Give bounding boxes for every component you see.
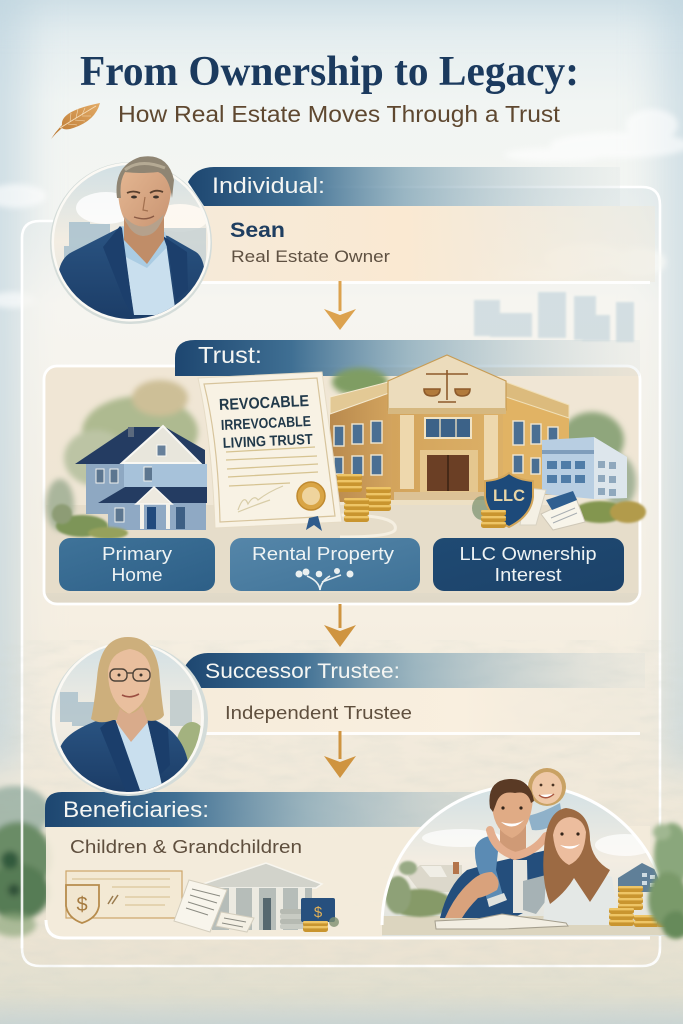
trees behind buildings	[46, 368, 636, 531]
individual panel	[200, 206, 655, 282]
icon: small tree	[296, 568, 353, 590]
panel bottom edge	[200, 281, 650, 284]
pill: LLC ownership: Interest	[494, 565, 562, 585]
illustration: certificate	[66, 871, 182, 923]
mom	[543, 808, 619, 925]
distant skyline	[474, 292, 634, 342]
text: children and grandchildren: Children & Grandchildren	[70, 837, 302, 857]
clouds inside frame	[495, 244, 666, 280]
foliage: left	[0, 786, 52, 937]
pill: rental property	[230, 538, 420, 591]
document heading	[219, 393, 313, 452]
name: Sean: Sean	[230, 219, 285, 242]
illustration: coins and dollar card	[280, 898, 339, 932]
section: individual	[188, 167, 655, 284]
outer frame	[22, 187, 660, 966]
beneficiaries panel	[46, 826, 650, 938]
ground and path	[46, 505, 638, 593]
individual banner	[188, 167, 620, 206]
child legs and arms	[475, 836, 503, 900]
arch: house	[408, 865, 462, 892]
successor panel	[200, 688, 640, 734]
illustration: papers	[174, 880, 254, 932]
frame line over foliage	[21, 780, 23, 948]
section: trust	[44, 340, 646, 604]
trust banner	[175, 340, 640, 376]
office building	[542, 437, 627, 499]
arch outline	[382, 785, 668, 925]
portrait: Sean	[50, 156, 212, 330]
mottled texture	[0, 640, 683, 1024]
portrait: trustee	[50, 637, 208, 800]
courthouse	[330, 355, 569, 505]
background clouds	[0, 109, 683, 308]
shield with dollar: $	[76, 894, 88, 916]
successor banner	[184, 653, 645, 688]
arch: office	[618, 863, 660, 892]
document heading: LIVING TRUST	[222, 432, 313, 452]
pill: primary home: Primary	[102, 544, 172, 564]
role: Real Estate Owner	[231, 247, 390, 266]
LLC shield	[472, 473, 585, 530]
child	[528, 768, 566, 830]
pill: primary home: Home	[112, 565, 162, 585]
house	[75, 426, 207, 530]
trust label: Trust:	[198, 342, 262, 368]
pill: LLC ownership: LLC Ownership	[460, 544, 596, 564]
dad	[440, 779, 548, 918]
coin stacks	[609, 886, 668, 927]
title: From Ownership to Legacy:	[80, 49, 579, 95]
seal	[297, 482, 325, 531]
beneficiaries banner	[45, 792, 570, 827]
open book	[435, 914, 568, 929]
illustration: bank building	[203, 863, 322, 930]
document heading: IRREVOCABLE	[221, 414, 312, 434]
family	[435, 768, 668, 929]
pill: rental property: Rental Property	[252, 544, 394, 564]
arrow 1	[324, 281, 356, 330]
courthouse windows	[334, 421, 558, 475]
bushes	[52, 501, 646, 539]
arrow 3	[324, 731, 356, 778]
beneficiaries label: Beneficiaries:	[63, 797, 209, 822]
pill: LLC ownership	[433, 538, 624, 591]
foliage: right	[648, 823, 683, 939]
LLC text: LLC	[493, 486, 525, 505]
trustee name: Independent Trustee	[225, 703, 412, 723]
pill: primary home	[59, 538, 215, 591]
subtitle: How Real Estate Moves Through a Trust	[118, 101, 560, 127]
arch: bushes	[385, 861, 452, 917]
coins beside document	[337, 474, 391, 522]
scales icon	[424, 370, 470, 402]
section: beneficiaries	[45, 768, 672, 938]
document heading: REVOCABLE	[219, 393, 310, 414]
successor label: Successor Trustee:	[205, 659, 400, 683]
section: successor trustee	[184, 653, 645, 735]
family arch	[382, 785, 672, 938]
arrow 2	[324, 604, 356, 647]
illustration: coins and dollar card: $	[314, 904, 323, 921]
trust panel	[44, 366, 640, 604]
document: trust deed	[198, 372, 342, 531]
individual label: Individual:	[212, 173, 325, 198]
icon: feather	[51, 103, 100, 139]
